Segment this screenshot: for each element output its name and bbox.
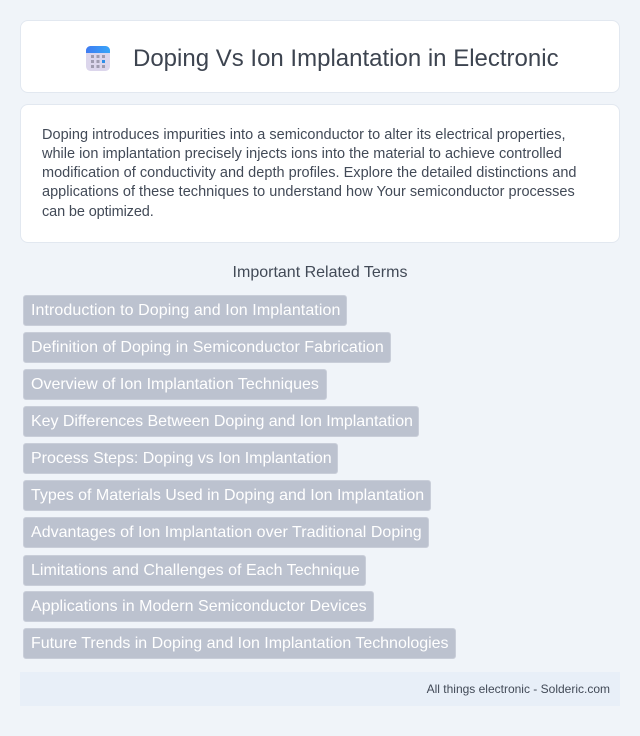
intro paragraph: while ion implantation precisely injects ions into the material to achieve controlled [42,146,562,162]
tag 3: Overview of Ion Implantation Techniques [31,376,319,393]
term tags [23,295,456,659]
tag 1: Introduction to Doping and Ion Implantation [31,302,340,319]
tag 7: Advantages of Ion Implantation over Traditional Doping [31,524,422,541]
tag 5: Process Steps: Doping vs Ion Implantation [31,450,332,467]
section heading: Important Related Terms [233,264,407,281]
intro paragraph: can be optimized. [42,204,154,220]
title: Doping Vs Ion Implantation in Electronic [133,45,559,72]
tag 10: Future Trends in Doping and Ion Implantation Technologies [31,635,449,652]
tag 6: Types of Materials Used in Doping and Ion Implantation [31,487,424,504]
tag 3 [23,369,327,400]
tag 8: Limitations and Challenges of Each Technique [31,562,360,579]
tag 10 [23,628,456,659]
footer bar [20,672,620,706]
icon: calendar grid [86,46,110,71]
tag 7 [23,517,429,548]
intro paragraph: modification of conductivity and depth profiles. Explore the detailed distinctions and [42,165,577,181]
tag 4 [23,406,419,437]
header panel [20,20,620,93]
tag 5 [23,443,338,474]
footer credit: All things electronic - Solderic.com [427,682,610,696]
intro paragraph: Doping introduces impurities into a semiconductor to alter its electrical properties, [42,127,566,143]
tag 1 [23,295,347,326]
tag 9: Applications in Modern Semiconductor Devices [31,598,367,615]
tag 4: Key Differences Between Doping and Ion Implantation [31,413,413,430]
tag 8 [23,555,366,586]
intro paragraph: applications of these techniques to understand how Your semiconductor processes [42,184,575,200]
tag 2: Definition of Doping in Semiconductor Fabrication [31,339,384,356]
tag 6 [23,480,431,511]
intro paragraph [42,127,577,220]
tag 2 [23,332,391,363]
intro text panel [20,104,620,243]
tag 9 [23,591,374,622]
